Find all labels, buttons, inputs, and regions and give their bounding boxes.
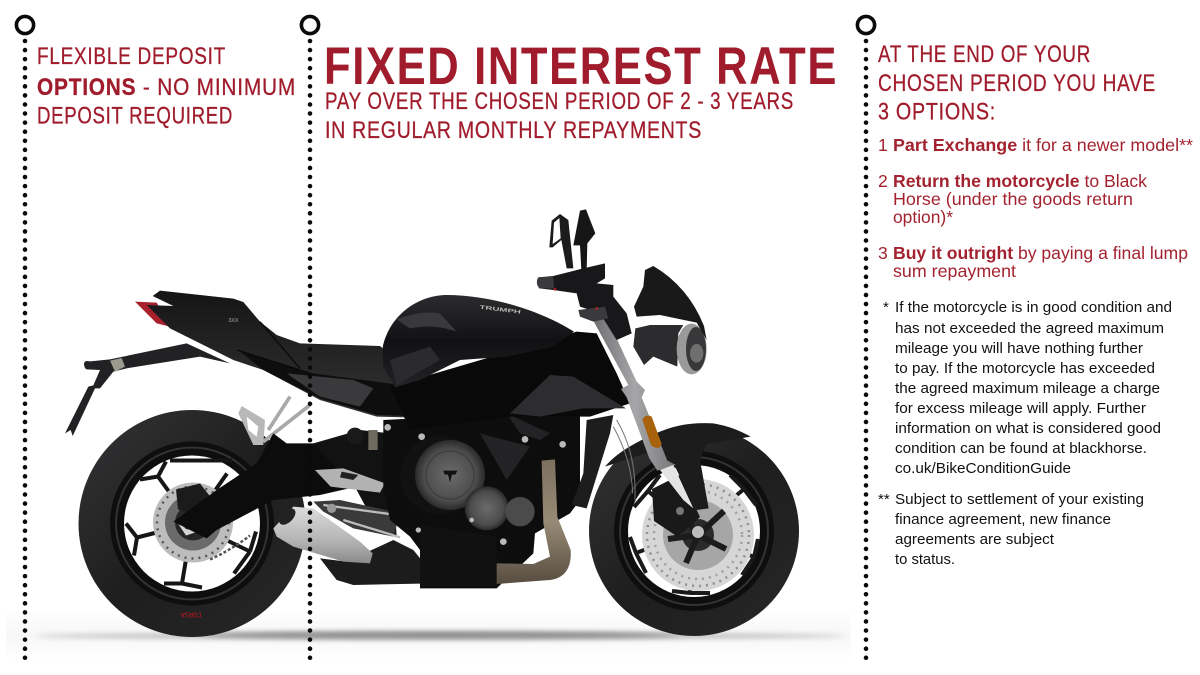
footnote: single asterisk: the agreed maximum mileage a charge — [895, 380, 1160, 397]
shock and pivot area — [313, 428, 397, 537]
motorcycle body traced parts — [65, 209, 751, 588]
mirrors — [549, 209, 595, 270]
footnote: double asterisk: Subject to settlement of your existing — [895, 491, 1144, 508]
footnote: single asterisk: information on what is considered good — [895, 420, 1161, 437]
footnote: double asterisk — [878, 491, 1144, 568]
frame and tank — [383, 295, 630, 430]
fender — [605, 423, 751, 510]
footnote: single asterisk: has not exceeded the agreed maximum — [895, 320, 1164, 337]
front brake caliper and cable — [613, 420, 635, 500]
motorcycle illustration — [65, 209, 799, 637]
front section — [383, 209, 751, 588]
dotted timeline lines — [16, 16, 875, 662]
footnote: single asterisk: for excess mileage will apply. Further — [895, 400, 1146, 417]
exhaust headers — [497, 459, 571, 584]
options list: option)* — [893, 207, 953, 227]
footnote: double asterisk: ** — [878, 491, 890, 508]
options list: Horse (under the goods return — [893, 189, 1133, 209]
footnote: single asterisk: mileage you will have nothing further — [895, 340, 1143, 357]
column 1 heading: flexible deposit — [37, 43, 296, 130]
footnote: single asterisk: condition can be found at blackhorse. — [895, 440, 1147, 457]
headlight — [633, 266, 707, 374]
footnote: double asterisk: to status. — [895, 551, 955, 568]
column 1 heading: flexible deposit: FLEXIBLE DEPOSIT — [37, 43, 226, 70]
muffler — [273, 506, 435, 585]
ground shadow under motorcycle — [6, 610, 851, 660]
column 2 subheading: PAY OVER THE CHOSEN PERIOD OF 2 - 3 YEARS — [325, 88, 794, 115]
footnote: single asterisk — [883, 299, 1172, 477]
rear wheel — [78, 410, 306, 637]
options list: 1 — [878, 135, 888, 155]
rear wheel: CORSA — [180, 610, 202, 618]
options list — [878, 135, 1193, 281]
options list: Return the motorcycle to Black — [893, 171, 1147, 191]
heel guard and footrest — [313, 468, 412, 537]
footnote: single asterisk: If the motorcycle is in good condition and — [895, 299, 1172, 316]
options list: Part Exchange it for a newer model** — [893, 135, 1193, 155]
front wheel — [589, 426, 799, 636]
column 1 heading: flexible deposit: OPTIONS - NO MINIMUM — [37, 74, 296, 101]
footnote: single asterisk: * — [883, 299, 889, 316]
front fork — [593, 318, 693, 508]
column 2 subheading — [325, 88, 794, 144]
frame and tank: TRUMPH — [479, 305, 521, 316]
column 3 heading: 3 OPTIONS: — [878, 98, 996, 126]
options list: sum repayment — [893, 261, 1016, 281]
footnote: double asterisk: agreements are subject — [895, 531, 1055, 548]
options list: 2 — [878, 171, 888, 191]
footnote: double asterisk: finance agreement, new finance — [895, 511, 1111, 528]
number plate hanger — [65, 343, 230, 436]
seat and tail: 3XX — [228, 318, 239, 324]
column 2 title: fixed interest rate: FIXED INTEREST RATE — [324, 37, 838, 96]
swingarm — [173, 433, 360, 538]
column 3 heading — [878, 41, 1156, 126]
engine block — [383, 408, 580, 588]
footnote: single asterisk: to pay. If the motorcycle has exceeded — [895, 360, 1155, 377]
seat and tail — [135, 291, 417, 417]
radiator shroud — [572, 415, 613, 508]
handlebar controls — [537, 263, 632, 340]
column 2 subheading: IN REGULAR MONTHLY REPAYMENTS — [325, 117, 702, 144]
options list: 3 — [878, 243, 888, 263]
column 1 heading: flexible deposit: DEPOSIT REQUIRED — [37, 102, 233, 130]
column 3 heading: AT THE END OF YOUR — [878, 41, 1091, 68]
subframe struts — [238, 397, 310, 445]
footnote: single asterisk: co.uk/BikeConditionGuide — [895, 460, 1071, 477]
options list: Buy it outright by paying a final lump — [893, 243, 1188, 263]
